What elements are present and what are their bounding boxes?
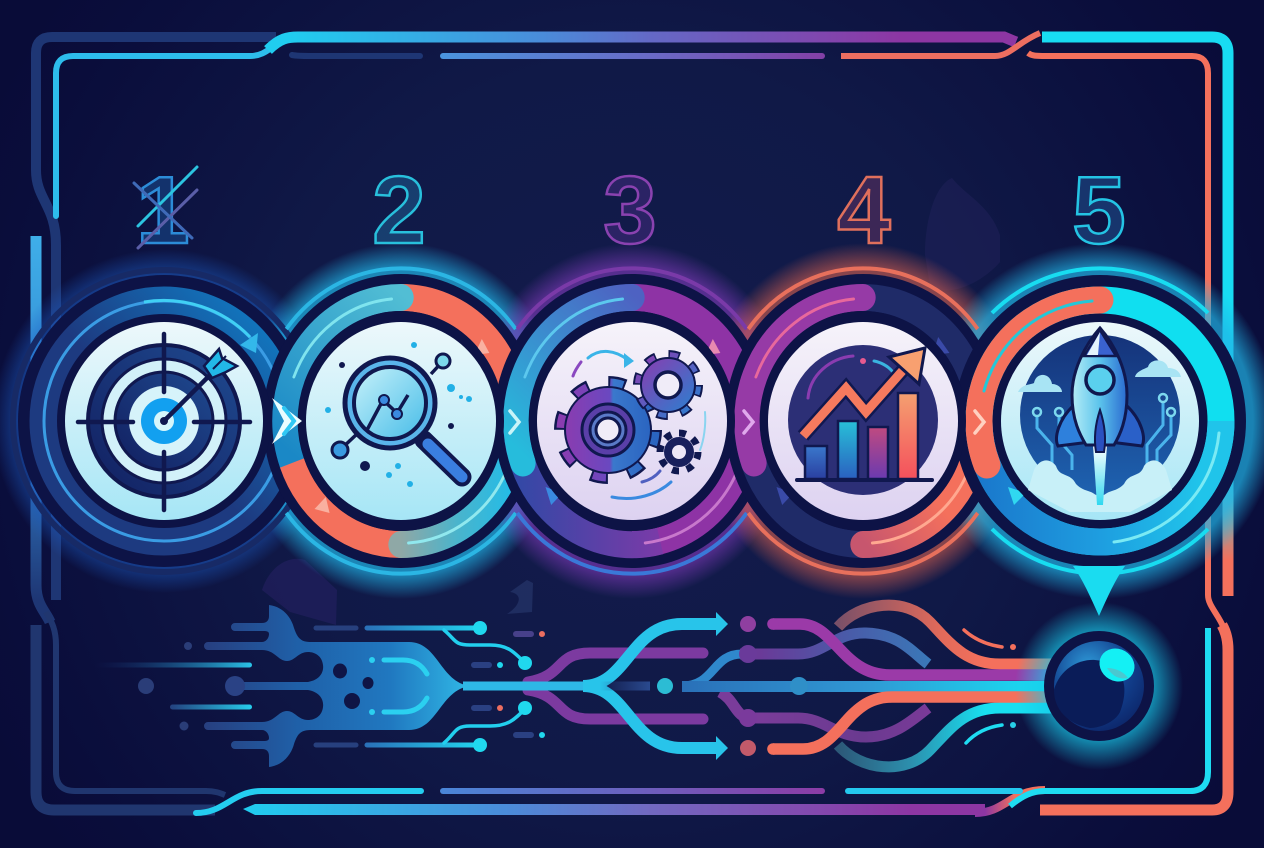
- disc 3: [529, 311, 735, 531]
- left blue manifold: [204, 605, 470, 767]
- center line: [682, 654, 1054, 695]
- faint background shapes: [262, 178, 1000, 625]
- step arrows: [256, 398, 984, 444]
- end node sphere: [1015, 602, 1183, 770]
- icon: growth bar chart: [788, 345, 938, 495]
- cyan split arrows: [583, 612, 728, 760]
- disc 1: [57, 314, 271, 528]
- flow diagram: converging streams: [95, 605, 1054, 767]
- chevron 2 to 3: [510, 411, 519, 433]
- icon: magnifier with data: [325, 342, 472, 487]
- icon: gears: [561, 351, 705, 499]
- disc 4: [760, 311, 966, 531]
- converging colored streams: [773, 624, 1052, 749]
- upper and lower circuit traces: [316, 621, 545, 752]
- ring band 4: [725, 268, 1001, 574]
- disc 2: [298, 311, 504, 531]
- ring band 3: [494, 268, 770, 574]
- number 2: 2: [372, 157, 426, 264]
- glowing chevron 1 to 2: [256, 398, 304, 444]
- central stem: [463, 682, 593, 690]
- icon: rocket launch: [1018, 328, 1181, 512]
- number 4: 4: [837, 157, 891, 264]
- disc 5: [993, 314, 1207, 528]
- process ring bands: [13, 268, 1246, 574]
- small gear: [660, 433, 698, 471]
- large gear: [561, 383, 655, 477]
- number 5: 5: [1072, 157, 1126, 264]
- number 1: 1: [136, 157, 190, 264]
- step numbers: [134, 157, 1126, 264]
- icon: target with arrow: [78, 334, 250, 510]
- number 3: 3: [603, 157, 657, 264]
- small accents near sphere: [964, 630, 1016, 743]
- chevron 3 to 4: [744, 411, 753, 433]
- ring band 1: [13, 270, 315, 572]
- chevron 4 to 5: [975, 411, 984, 433]
- pointer from step 5: [1073, 566, 1125, 616]
- rear arcs: [720, 605, 1052, 767]
- ring band 2: [263, 268, 539, 574]
- stream dots: [739, 616, 779, 756]
- glow halos: [0, 243, 1264, 599]
- medium gear: [638, 355, 698, 415]
- ring band 5: [954, 268, 1246, 574]
- left trailing bars and dots: [95, 642, 252, 730]
- step discs: [57, 311, 1207, 531]
- purple side streams: [528, 653, 703, 719]
- segment and dot: [600, 682, 650, 690]
